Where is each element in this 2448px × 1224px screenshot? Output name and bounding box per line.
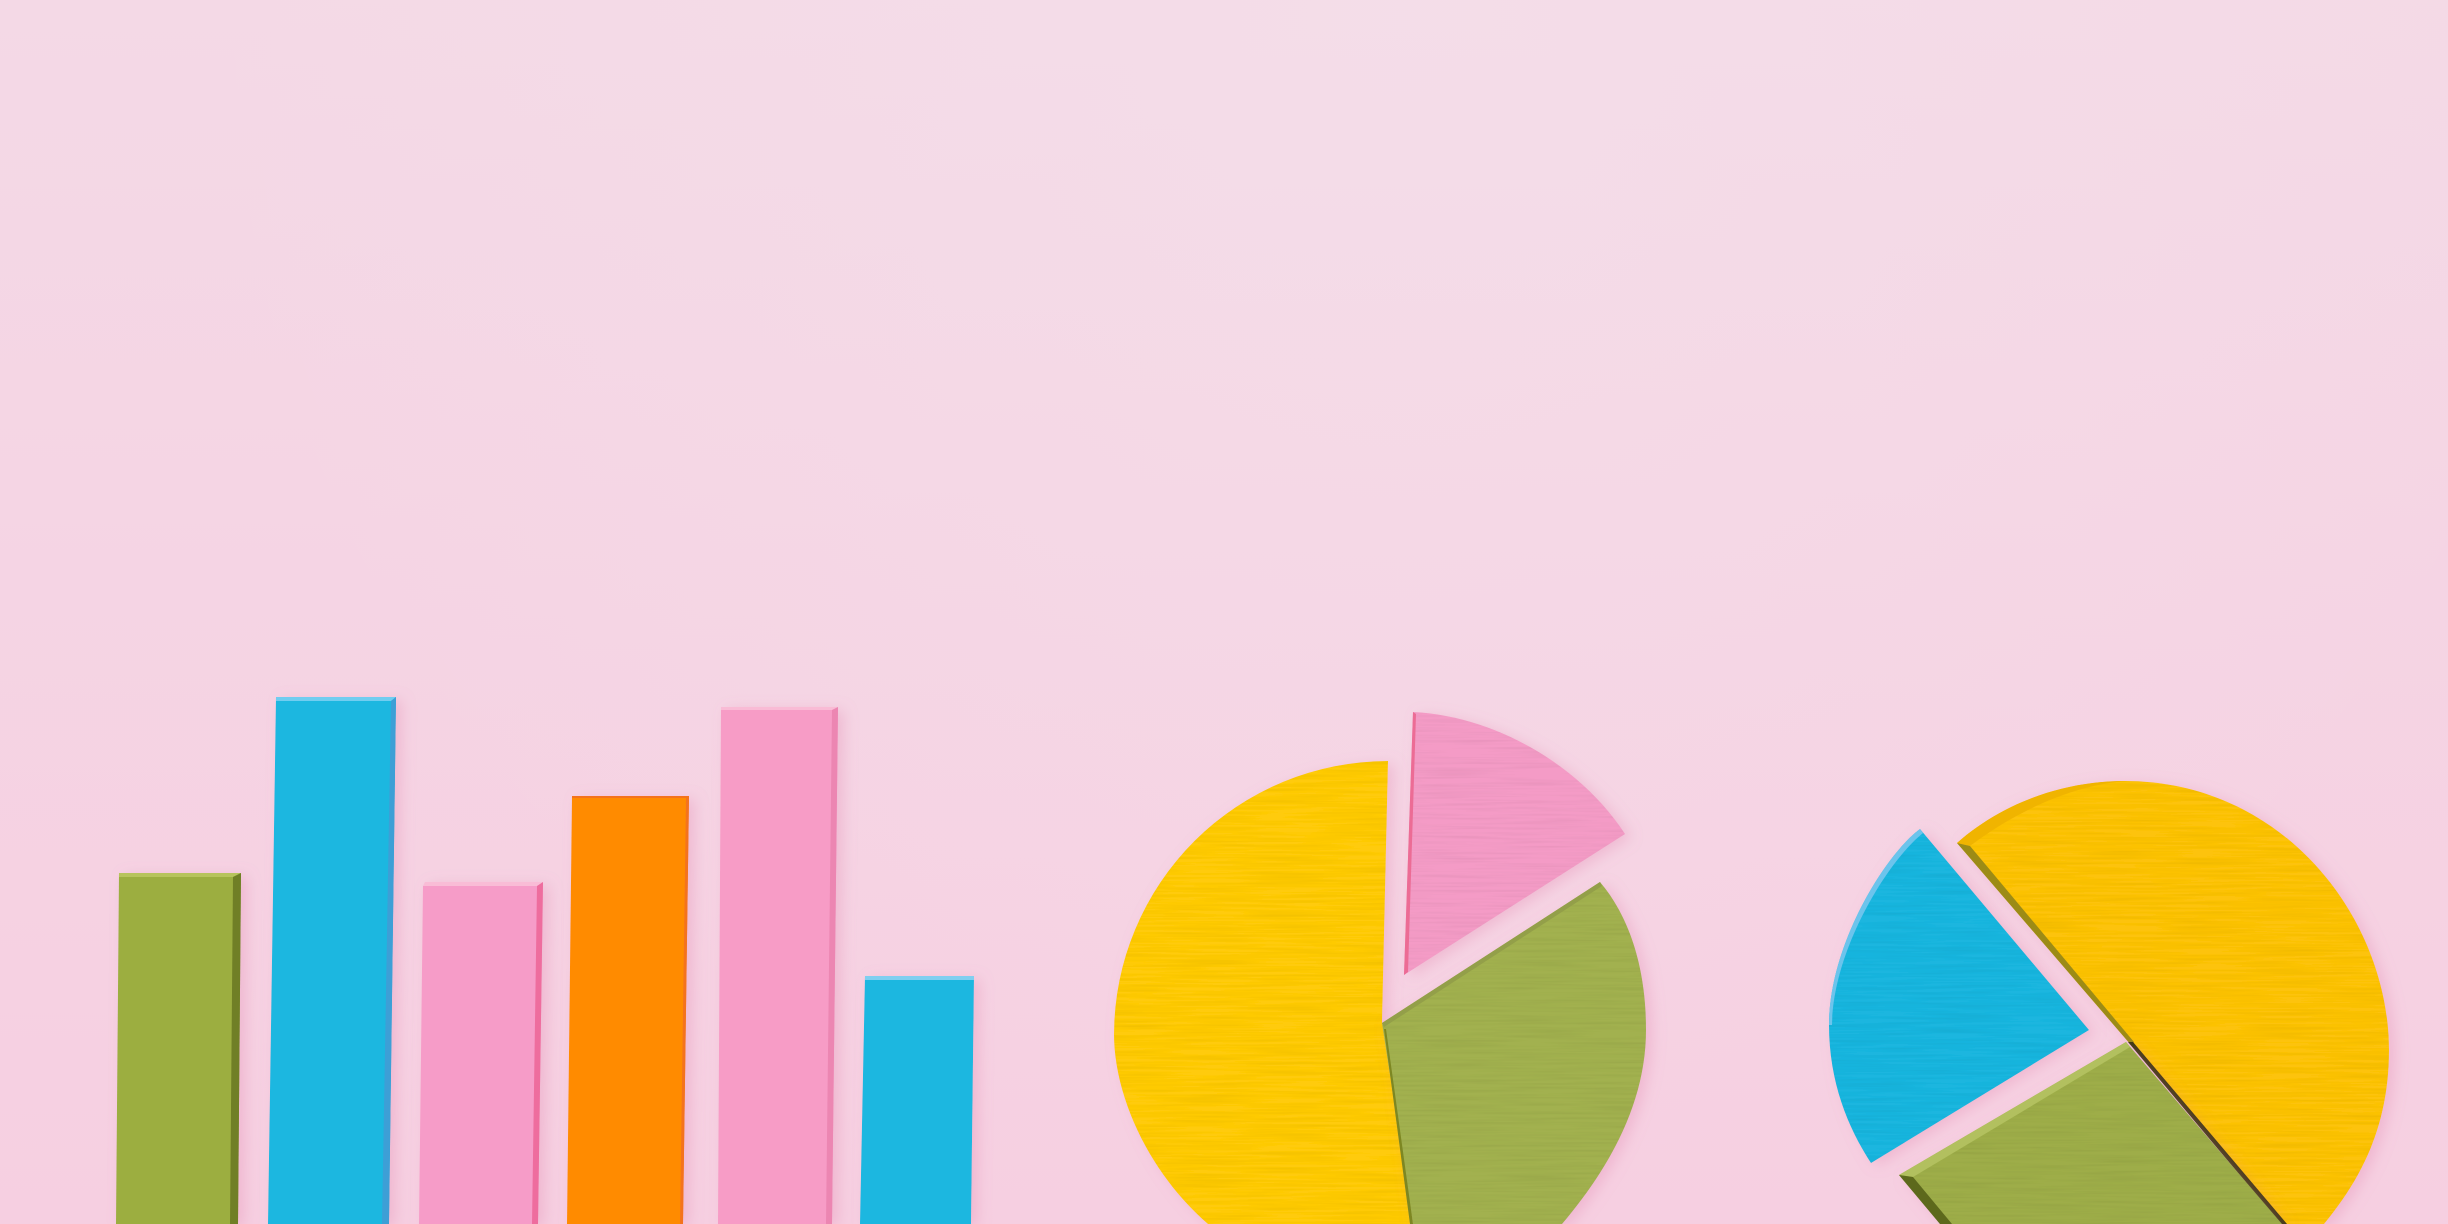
bar: short pink xyxy=(419,882,543,1224)
slice: green xyxy=(1382,882,1646,1224)
slice: yellow half xyxy=(1114,761,1413,1224)
bar chart xyxy=(116,697,974,1224)
pie chart: left xyxy=(1114,712,1646,1224)
slice: blue xyxy=(1829,829,2089,1163)
bar: short blue xyxy=(860,976,974,1224)
bar: green xyxy=(116,873,241,1224)
slice: yellow large xyxy=(1957,781,2389,1224)
slice: green xyxy=(1899,1042,2282,1224)
bar: tall pink xyxy=(718,707,838,1224)
slice: pink xyxy=(1404,712,1625,975)
bar: orange xyxy=(567,796,689,1224)
pie chart: right xyxy=(1829,781,2389,1224)
bar: tall blue xyxy=(268,697,396,1224)
